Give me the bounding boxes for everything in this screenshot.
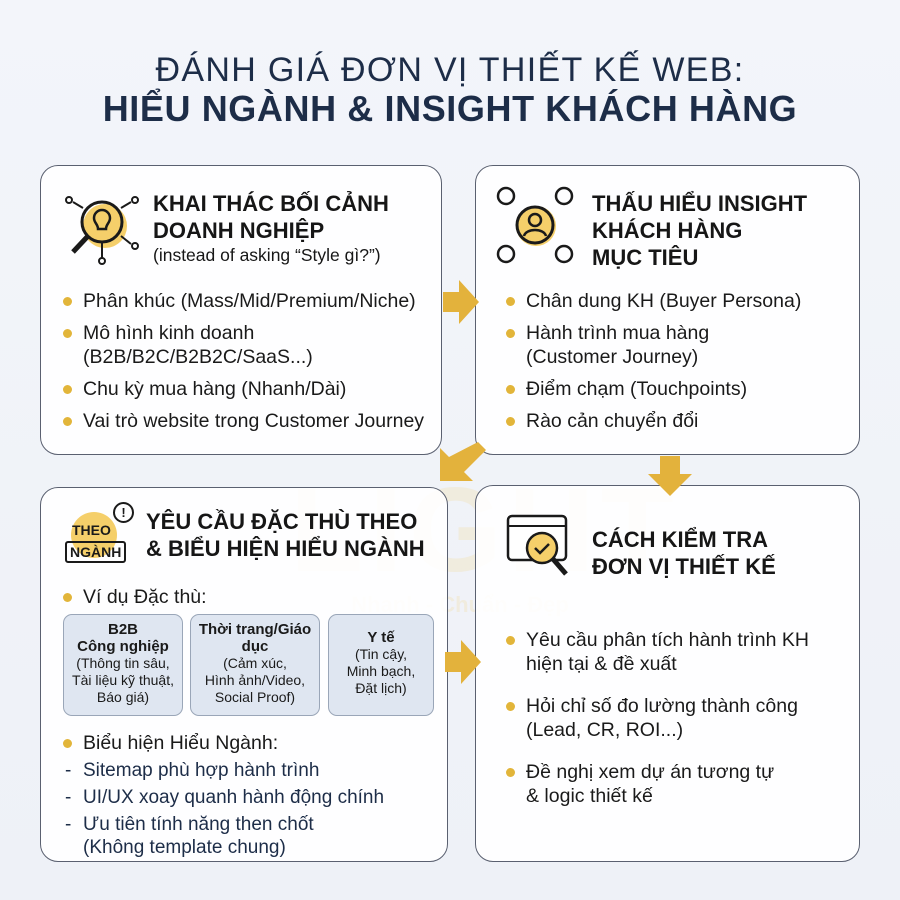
panel: industry requirements [40,487,448,862]
title: ĐÁNH GIÁ ĐƠN VỊ THIẾT KẾ WEB: [156,51,744,89]
bullet list [506,290,801,432]
bullet: expressions [63,732,384,858]
box: B2B: Báo giá) [97,689,149,705]
bullet list: (B2B/B2C/B2B2C/SaaS...) [83,346,313,368]
example boxes [63,614,434,716]
icon: persona [496,186,574,264]
heading: YÊU CẦU ĐẶC THÙ THEO [146,509,417,534]
bullet list [506,629,809,807]
box: health: (Tin cậy, [355,646,407,662]
heading [592,526,776,579]
icon: theo ngành: THEO [72,522,111,538]
box: health: Đặt lịch) [355,680,407,696]
bullet: expressions: (Không template chung) [83,837,286,858]
box: fashion: Thời trang/Giáo [199,621,311,638]
heading: ĐƠN VỊ THIẾT KẾ [592,554,776,579]
heading: KHAI THÁC BỐI CẢNH [153,191,389,216]
heading: THẤU HIỂU INSIGHT [592,191,807,216]
box: health: Minh bạch, [347,663,415,679]
icon: theo ngành: NGÀNH [70,544,121,560]
bullet list: Hành trình mua hàng [526,322,709,344]
box: B2B: Công nghiệp [77,638,169,655]
heading [146,509,425,561]
bullet list: Rào cản chuyển đổi [526,410,698,432]
bullet list: Phân khúc (Mass/Mid/Premium/Niche) [83,290,416,312]
heading: & BIỂU HIỆN HIỂU NGÀNH [146,536,425,561]
bullet list: Yêu cầu phân tích hành trình KH [526,629,809,651]
arrow: diagonal down-left [440,442,486,481]
arrow: right top [443,280,479,324]
bullet: expressions: UI/UX xoay quanh hành động chính [83,787,384,808]
arrow: down [648,456,692,496]
heading: MỤC TIÊU [592,245,698,270]
panel: customer insight [475,165,860,455]
bullet: examples: Ví dụ Đặc thù: [83,586,207,608]
bullet list: (Customer Journey) [526,346,698,368]
box: B2B: Tài liệu kỹ thuật, [72,672,174,688]
box: fashion [190,614,320,716]
heading [592,190,807,270]
panel: how to check [475,485,860,862]
heading: DOANH NGHIỆP [153,218,324,243]
bullet list: Mô hình kinh doanh [83,322,254,344]
box: B2B: B2B [108,621,138,638]
box: B2B: (Thông tin sâu, [76,655,170,671]
bullet: expressions: Sitemap phù hợp hành trình [83,760,319,781]
icon: browser check [506,514,568,576]
bullet list [63,290,424,432]
icon: theo ngành: ! [121,505,126,520]
heading [153,191,389,265]
box: health [328,614,434,716]
heading: KHÁCH HÀNG [592,218,742,243]
box: fashion: dục [242,638,268,655]
bullet list: & logic thiết kế [526,785,653,807]
watermark: Nhanh - Chuẩn - Đẹp [351,592,569,617]
watermark: LIGHT [290,463,680,597]
heading: CÁCH KIỂM TRA [592,527,768,552]
heading: (instead of asking “Style gì?”) [153,245,381,265]
box: B2B [63,614,183,716]
icon: theo ngành [65,502,134,563]
bullet: expressions: Ưu tiên tính năng then chốt [83,814,314,835]
bullet list: Chân dung KH (Buyer Persona) [526,290,801,312]
box: fashion: (Cảm xúc, [223,655,287,671]
bullet list: (Lead, CR, ROI...) [526,719,683,741]
panel: business context [40,165,442,455]
bullet list: Vai trò website trong Customer Journey [83,410,424,432]
bullet list: Chu kỳ mua hàng (Nhanh/Dài) [83,378,346,400]
bullet list: Hỏi chỉ số đo lường thành công [526,695,798,717]
box: fashion: Social Proof) [215,689,295,705]
box: fashion: Hình ảnh/Video, [205,672,305,688]
arrow: right bottom [445,640,481,684]
bullet list: Đề nghị xem dự án tương tự [526,761,774,783]
bullet list: Điểm chạm (Touchpoints) [526,378,747,400]
bullet list: hiện tại & đề xuất [526,653,677,675]
bullet: expressions: Biểu hiện Hiểu Ngành: [83,732,278,754]
icon: bulb magnifier [65,196,139,265]
box: health: Y tế [367,629,395,646]
subtitle: HIỂU NGÀNH & INSIGHT KHÁCH HÀNG [103,88,797,129]
